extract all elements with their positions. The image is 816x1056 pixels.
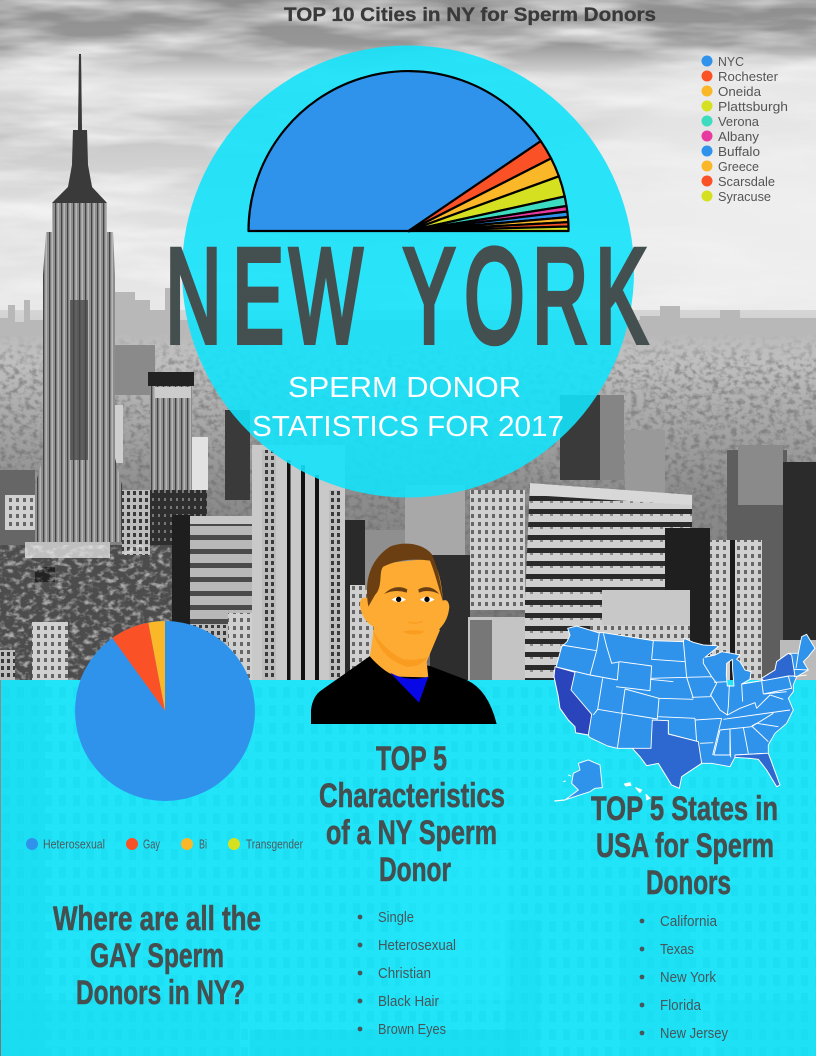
list: top 5 states: Florida — [660, 997, 702, 1014]
heading: top 5 characteristics: TOP 5 — [376, 740, 447, 778]
heading: top 5 characteristics: Characteristics — [319, 777, 505, 815]
subtitle — [252, 372, 564, 443]
main title: New York: NEW YORK — [166, 222, 647, 371]
heading: where are the gay sperm donors: Where are all the — [53, 900, 261, 938]
legend: orientation: Gay — [143, 838, 161, 852]
legend: top 10 cities: Plattsburgh — [718, 100, 788, 114]
legend: top 10 cities: Oneida — [718, 85, 761, 99]
heading: where are the gay sperm donors: Donors in NY? — [76, 974, 245, 1012]
icon: donor portrait — [311, 544, 497, 724]
legend: orientation — [26, 838, 303, 852]
legend: top 10 cities: Buffalo — [718, 145, 760, 159]
heading: top 5 states — [591, 790, 778, 902]
subtitle: SPERM DONOR — [288, 372, 521, 404]
heading: top 5 characteristics: Donor — [379, 851, 451, 889]
list: top 5 states: California — [660, 913, 718, 930]
list: top 5 states: New Jersey — [660, 1025, 728, 1042]
legend: top 10 cities: Syracuse — [718, 190, 771, 204]
legend: top 10 cities: Rochester — [718, 70, 778, 84]
legend: top 10 cities: Verona — [718, 115, 759, 129]
list: top 5 characteristics: Christian — [378, 965, 431, 982]
list: top 5 states — [640, 913, 728, 1042]
subtitle: STATISTICS FOR 2017 — [252, 411, 564, 443]
legend: orientation: Heterosexual — [43, 838, 105, 852]
heading: top 5 states: Donors — [646, 864, 731, 902]
legend: top 10 cities: Scarsdale — [718, 175, 775, 189]
heading: top 5 characteristics: of a NY Sperm — [326, 814, 497, 852]
list: top 5 characteristics: Black Hair — [378, 993, 439, 1010]
legend: top 10 cities: NYC — [718, 55, 744, 69]
chart title: top 10 cities: TOP 10 Cities in NY for Sperm Donors — [284, 5, 656, 26]
heading: where are the gay sperm donors — [53, 900, 261, 1012]
legend: top 10 cities — [702, 55, 788, 204]
heading: top 5 characteristics — [319, 740, 505, 889]
list: top 5 characteristics — [358, 909, 456, 1038]
list: top 5 characteristics: Brown Eyes — [378, 1021, 446, 1038]
map: United States by state — [554, 626, 815, 801]
legend: orientation: Bi — [199, 838, 207, 852]
cyan lower panel — [1, 680, 816, 1056]
list: top 5 characteristics: Heterosexual — [378, 937, 456, 954]
legend: top 10 cities: Greece — [718, 160, 759, 174]
pie chart: orientation — [75, 621, 255, 801]
legend: orientation: Transgender — [246, 838, 303, 852]
list: top 5 states: Texas — [660, 941, 694, 958]
list: top 5 characteristics: Single — [378, 909, 414, 926]
legend: top 10 cities: Albany — [718, 130, 760, 144]
heading: where are the gay sperm donors: GAY Sperm — [90, 937, 224, 975]
cyan title circle — [182, 46, 634, 498]
list: top 5 states: New York — [660, 969, 716, 986]
half pie chart: top 10 cities — [248, 71, 569, 231]
